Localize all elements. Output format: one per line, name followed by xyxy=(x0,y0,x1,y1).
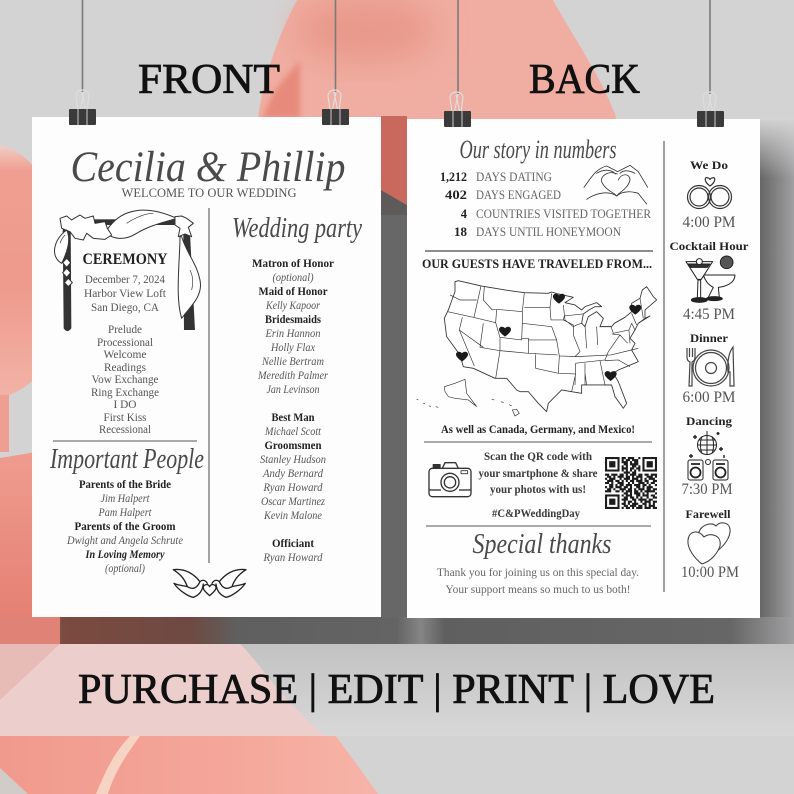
wedding party list: Michael Scott xyxy=(264,424,322,438)
wedding party list: Officiant xyxy=(272,536,314,550)
important people list: (optional) xyxy=(105,561,145,575)
schedule: Farewell xyxy=(681,507,739,581)
schedule: Dancing: 7:30 PM xyxy=(682,481,732,498)
story statistics: DAYS UNTIL HONEYMOON xyxy=(476,225,621,239)
translucent banner xyxy=(0,644,794,736)
heading: Our story in numbers: Our story in numbers xyxy=(460,135,616,164)
QR invitation text: Scan the QR code with xyxy=(484,449,592,463)
wedding party list: (optional) xyxy=(272,270,314,284)
binder clips xyxy=(69,90,724,127)
story statistics: 4 xyxy=(461,207,468,221)
wedding party list: Meredith Palmer xyxy=(257,368,328,382)
wedding party list xyxy=(252,256,335,564)
icon: camera xyxy=(429,463,471,497)
order of service list: I DO xyxy=(114,397,137,411)
ceremony block: San Diego, CA xyxy=(91,300,159,314)
icon: wedding arch xyxy=(55,210,201,331)
thank you message: Thank you for joining us on this special day. xyxy=(437,565,639,579)
wedding party list: Kelly Kapoor xyxy=(265,298,320,312)
story statistics: 1,212 xyxy=(440,170,467,184)
panel: front of program xyxy=(32,117,381,617)
names title: Cecilia & Phillip xyxy=(70,144,346,191)
ceremony block: CEREMONY xyxy=(82,251,168,268)
banner text: PURCHASE | EDIT | PRINT | LOVE xyxy=(78,667,715,713)
wedding party list: Erin Hannon xyxy=(265,326,320,340)
heading: Wedding party: Wedding party xyxy=(232,212,362,244)
wedding party list: Ryan Howard xyxy=(263,480,323,494)
schedule: We Do: 4:00 PM xyxy=(682,214,736,231)
map: United States with guest hearts xyxy=(417,281,657,416)
order of service list: Vow Exchange xyxy=(92,372,158,386)
important people list: Parents of the Groom xyxy=(74,519,176,533)
schedule: Cocktail Hour xyxy=(670,239,749,323)
wedding party list: Holly Flax xyxy=(270,340,316,354)
schedule: We Do: We Do xyxy=(690,158,728,172)
QR invitation text xyxy=(478,449,598,520)
order of service list: Ring Exchange xyxy=(91,385,159,399)
order of service list xyxy=(91,322,159,436)
QR invitation text: your smartphone & share xyxy=(478,466,598,480)
wedding party list: Groomsmen xyxy=(264,438,322,452)
schedule: Farewell: Farewell xyxy=(686,507,731,521)
important people list: Dwight and Angela Schrute xyxy=(66,533,184,547)
column divider xyxy=(208,208,210,563)
icon: doves with heart xyxy=(173,569,246,597)
thank you message xyxy=(437,565,639,596)
important people list: Parents of the Bride xyxy=(79,477,172,491)
important people list: Pam Halpert xyxy=(98,505,152,519)
story statistics: COUNTRIES VISITED TOGETHER xyxy=(476,207,652,221)
order of service list: Prelude xyxy=(108,322,142,336)
order of service list: Recessional xyxy=(99,422,152,436)
important people list: In Loving Memory xyxy=(85,547,165,561)
ceremony block: December 7, 2024 xyxy=(85,272,165,286)
map hearts xyxy=(456,294,641,381)
story statistics: DAYS ENGAGED xyxy=(476,188,561,202)
wedding party list: Matron of Honor xyxy=(252,256,335,270)
schedule: Dancing xyxy=(682,414,732,498)
schedule: Dancing: Dancing xyxy=(686,414,732,428)
story statistics: DAYS DATING xyxy=(476,170,552,184)
wedding party list: Oscar Martinez xyxy=(261,494,325,508)
schedule: Dinner: 6:00 PM xyxy=(682,389,736,406)
wedding party list: Stanley Hudson xyxy=(260,452,326,466)
schedule: Cocktail Hour: 4:45 PM xyxy=(683,306,735,323)
hanging wires xyxy=(82,0,710,94)
wedding party list: Andy Bernard xyxy=(262,466,324,480)
wedding party list: Best Man xyxy=(272,410,315,424)
story statistics: 402 xyxy=(445,188,467,202)
schedule: Dinner: Dinner xyxy=(690,331,729,345)
story statistics: 18 xyxy=(454,225,467,239)
thank you message: Your support means so much to us both! xyxy=(446,582,630,596)
order of service list: First Kiss xyxy=(104,410,147,424)
wedding party list: Nellie Bertram xyxy=(261,354,324,368)
heading: FRONT: FRONT xyxy=(138,57,280,103)
schedule: Cocktail Hour: Cocktail Hour xyxy=(670,239,749,253)
wedding party list: Maid of Honor xyxy=(258,284,328,298)
schedule: We Do xyxy=(682,158,736,231)
important people list xyxy=(66,477,184,575)
story statistics xyxy=(440,170,652,239)
map footnote: As well as Canada, Germany, and Mexico! xyxy=(441,422,635,436)
subtitle: WELCOME TO OUR WEDDING xyxy=(122,186,296,200)
wedding party list: Bridesmaids xyxy=(265,312,321,326)
order of service list: Processional xyxy=(97,335,154,349)
schedule: Farewell: 10:00 PM xyxy=(681,564,739,581)
ceremony block xyxy=(82,251,168,314)
heading: Special thanks: Special thanks xyxy=(472,529,612,560)
heading: Important People: Important People xyxy=(49,443,204,475)
heading: BACK: BACK xyxy=(529,57,640,103)
wedding party list: Ryan Howard xyxy=(263,550,323,564)
ceremony block: Harbor View Loft xyxy=(84,286,167,300)
QR invitation text: #C&PWeddingDay xyxy=(492,506,580,520)
QR code xyxy=(605,458,657,508)
icon: hands forming a heart xyxy=(584,165,648,204)
schedule: Dinner xyxy=(682,331,736,406)
order of service list: Welcome xyxy=(104,347,146,361)
wedding party list: Jan Levinson xyxy=(266,382,320,396)
wedding party list: Kevin Malone xyxy=(263,508,323,522)
order of service list: Readings xyxy=(104,360,146,374)
panel: back of program xyxy=(407,119,760,618)
heading: guests traveled: OUR GUESTS HAVE TRAVELED FROM... xyxy=(422,257,652,271)
QR invitation text: your photos with us! xyxy=(490,482,586,496)
important people list: Jim Halpert xyxy=(100,491,150,505)
